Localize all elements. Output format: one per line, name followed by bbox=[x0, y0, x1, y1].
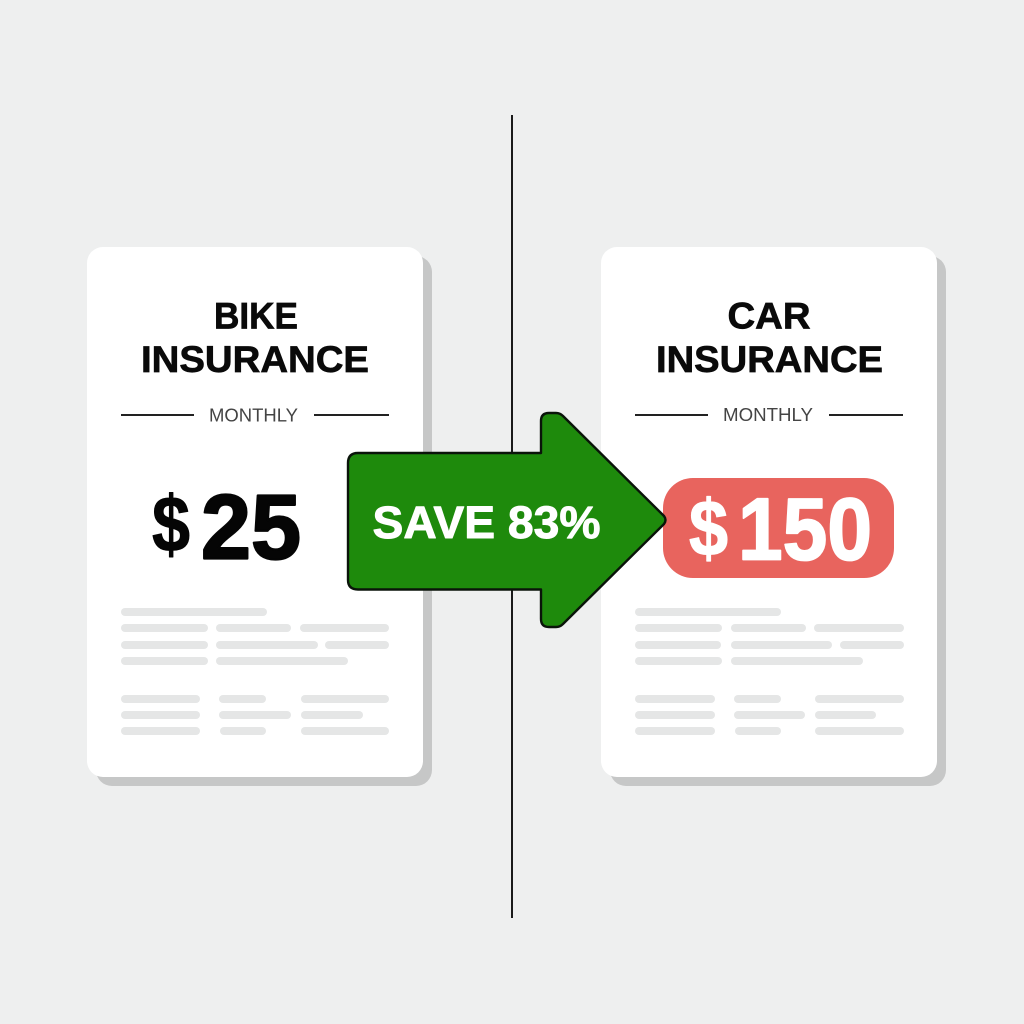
vertical divider line bbox=[511, 115, 513, 918]
heading: car insurance: INSURANCE bbox=[656, 338, 883, 380]
price pill: $150: 150 bbox=[738, 480, 872, 578]
placeholder text lines bbox=[635, 608, 904, 735]
card body bbox=[601, 247, 937, 777]
price: $25 bbox=[152, 476, 301, 578]
price: $25: 25 bbox=[201, 476, 301, 578]
price pill: $150 bbox=[663, 478, 894, 578]
arrow: save 83% bbox=[348, 413, 666, 627]
arrow shape bbox=[348, 413, 666, 627]
monthly label with rules: MONTHLY bbox=[209, 404, 298, 426]
heading: bike insurance: INSURANCE bbox=[141, 338, 369, 380]
card shadow bbox=[96, 256, 432, 786]
heading: bike insurance bbox=[141, 294, 369, 380]
heading: car insurance bbox=[656, 294, 883, 380]
price: $25: $ bbox=[152, 479, 190, 568]
price pill: $150: $ bbox=[689, 483, 728, 572]
panel: bike insurance card bbox=[87, 247, 432, 786]
card shadow bbox=[610, 256, 946, 786]
placeholder text lines bbox=[121, 608, 389, 735]
card body bbox=[87, 247, 423, 777]
panel: car insurance card bbox=[601, 247, 946, 786]
heading: bike insurance: BIKE bbox=[214, 294, 298, 336]
monthly label with rules: MONTHLY bbox=[723, 404, 813, 425]
arrow label: SAVE 83% bbox=[372, 497, 600, 548]
heading: car insurance: CAR bbox=[728, 294, 810, 336]
